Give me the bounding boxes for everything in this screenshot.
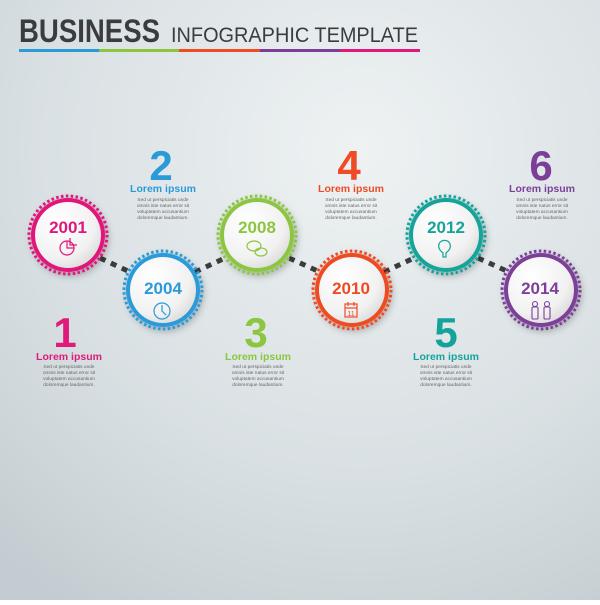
step 6: Lorem ipsum bbox=[509, 183, 575, 195]
step 6: omnis iste natus error sit bbox=[516, 203, 569, 209]
step 2 bbox=[130, 142, 196, 221]
step 2: 2 bbox=[149, 142, 173, 189]
step 2: voluptatem accusantium bbox=[137, 209, 189, 215]
step 3: Lorem ipsum bbox=[225, 351, 291, 363]
step 3: doloremque laudantium. bbox=[232, 382, 284, 388]
step 3: Sed ut perspiciatis unde bbox=[232, 364, 284, 370]
dashed connectors bbox=[100, 258, 509, 272]
gear 2001: 2001 bbox=[49, 218, 87, 237]
step 5: 5 bbox=[434, 309, 458, 356]
title bbox=[19, 13, 420, 52]
step 4: doloremque laudantium. bbox=[325, 215, 377, 221]
gear 2001 bbox=[29, 196, 107, 274]
step 3 bbox=[225, 309, 291, 388]
gear 2014: 2014 bbox=[521, 279, 559, 298]
step 5: Lorem ipsum bbox=[413, 351, 479, 363]
step 3: voluptatem accusantium bbox=[232, 376, 284, 382]
step 6: Sed ut perspiciatis unde bbox=[516, 197, 568, 203]
step 6: doloremque laudantium. bbox=[516, 215, 568, 221]
gear 2004: 2004 bbox=[144, 279, 182, 298]
step 5: omnis iste natus error sit bbox=[420, 370, 473, 376]
gear 2010 bbox=[313, 251, 391, 329]
step 2: omnis iste natus error sit bbox=[137, 203, 190, 209]
step 4: Sed ut perspiciatis unde bbox=[325, 197, 377, 203]
step 4: 4 bbox=[337, 142, 361, 189]
title: INFOGRAPHIC TEMPLATE bbox=[171, 24, 418, 47]
gear 2010: 2010 bbox=[332, 279, 370, 298]
step 1: Sed ut perspiciatis unde bbox=[43, 364, 95, 370]
step 1: doloremque laudantium. bbox=[43, 382, 95, 388]
step 1: voluptatem accusantium bbox=[43, 376, 95, 382]
step 4: omnis iste natus error sit bbox=[325, 203, 378, 209]
step 1 bbox=[36, 309, 102, 388]
step 5: doloremque laudantium. bbox=[420, 382, 472, 388]
gear 2008 bbox=[218, 196, 296, 274]
step 6 bbox=[509, 142, 575, 221]
step 2: doloremque laudantium. bbox=[137, 215, 189, 221]
gear 2008: 2008 bbox=[238, 218, 276, 237]
step 1: omnis iste natus error sit bbox=[43, 370, 96, 376]
title: BUSINESS bbox=[19, 13, 160, 49]
step 6: voluptatem accusantium bbox=[516, 209, 568, 215]
step 3: 3 bbox=[244, 309, 268, 356]
step 5: voluptatem accusantium bbox=[420, 376, 472, 382]
gear 2010: 11 bbox=[347, 311, 355, 318]
gear 2012 bbox=[407, 196, 485, 274]
step 5 bbox=[413, 309, 479, 388]
gear 2014 bbox=[502, 251, 580, 329]
step 5: Sed ut perspiciatis unde bbox=[420, 364, 472, 370]
gear 2012: 2012 bbox=[427, 218, 465, 237]
step 4: Lorem ipsum bbox=[318, 183, 384, 195]
step 1: 1 bbox=[53, 309, 77, 356]
step 1: Lorem ipsum bbox=[36, 351, 102, 363]
gear 2004 bbox=[124, 251, 202, 329]
step 4: voluptatem accusantium bbox=[325, 209, 377, 215]
step 3: omnis iste natus error sit bbox=[232, 370, 285, 376]
step 2: Lorem ipsum bbox=[130, 183, 196, 195]
step 6: 6 bbox=[529, 142, 553, 189]
step 2: Sed ut perspiciatis unde bbox=[137, 197, 189, 203]
step 4 bbox=[318, 142, 384, 221]
